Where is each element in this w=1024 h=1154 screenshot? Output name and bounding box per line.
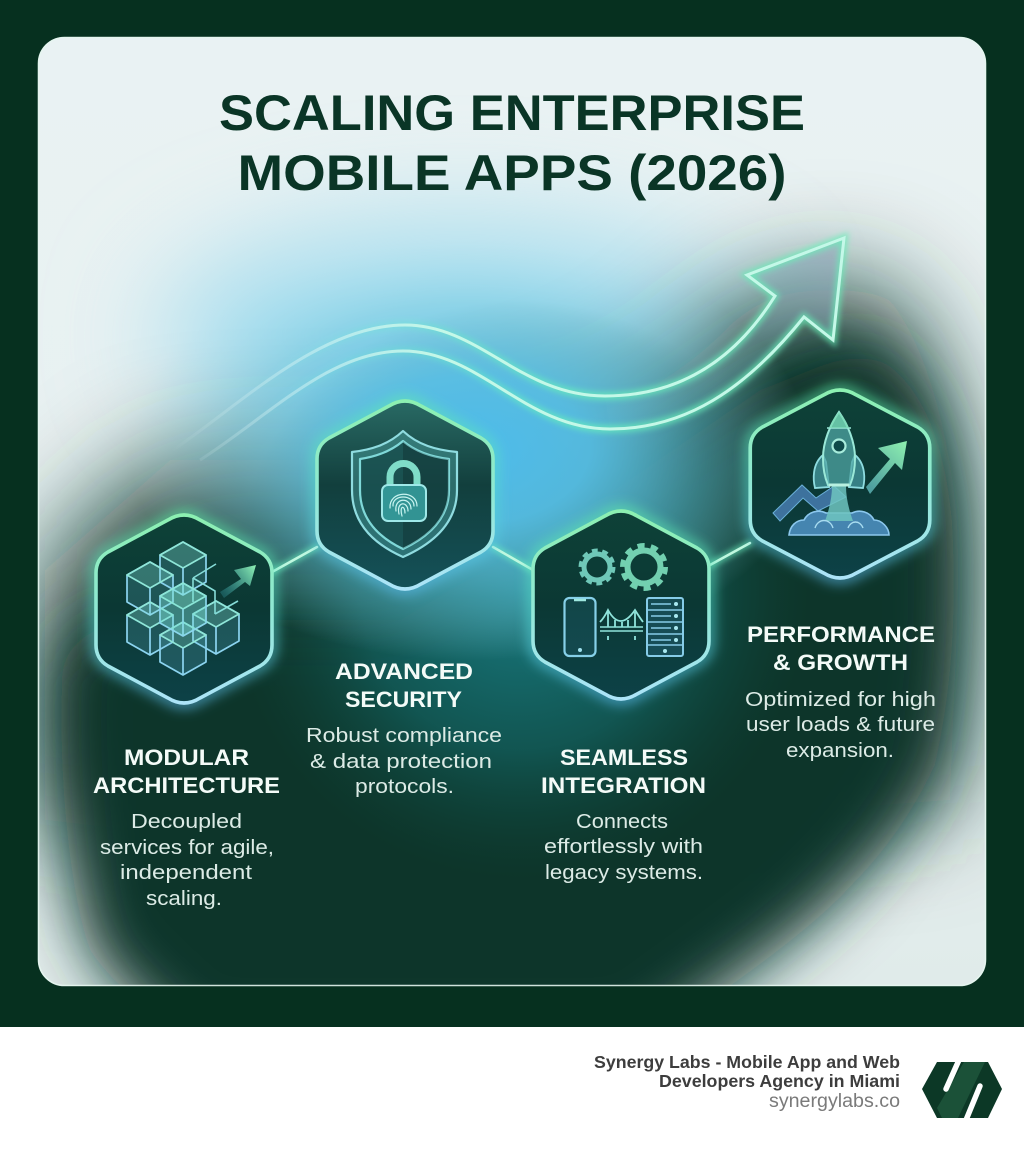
icon: shield with padlock	[352, 431, 457, 557]
footer	[0, 1027, 1024, 1154]
arrow: growth trend	[173, 238, 844, 460]
icon: Synergy Labs logo	[922, 1060, 1002, 1120]
step label: seamless integration: effortlessly with	[544, 835, 703, 858]
hexagon 2: advanced security	[317, 401, 493, 589]
step label: seamless integration: SEAMLESS	[560, 745, 688, 770]
step label: performance and growth: & GROWTH	[773, 650, 908, 675]
footer company text: synergylabs.co	[769, 1091, 900, 1112]
icon: cubes	[127, 542, 256, 675]
hexagon 3: seamless integration	[533, 511, 709, 699]
footer company text: Synergy Labs - Mobile App and Web	[594, 1052, 900, 1072]
step label: modular architecture: Decoupled	[131, 810, 242, 833]
step label: performance and growth	[745, 622, 936, 762]
step label: advanced security: protocols.	[355, 775, 454, 798]
hexagon 1: modular architecture	[96, 515, 272, 703]
step label: advanced security: ADVANCED	[335, 659, 473, 684]
step label: modular architecture: ARCHITECTURE	[93, 773, 280, 798]
step label: advanced security: & data protection	[310, 750, 492, 773]
step label: performance and growth: expansion.	[786, 739, 894, 762]
title: MOBILE APPS (2026)	[238, 145, 786, 201]
icon: rocket with growth arrow	[773, 412, 907, 535]
footer company text: Developers Agency in Miami	[659, 1071, 900, 1091]
step label: seamless integration	[541, 745, 706, 884]
step label: performance and growth: user loads & future	[746, 713, 935, 736]
step label: modular architecture: scaling.	[146, 887, 222, 910]
step label: advanced security: Robust compliance	[306, 724, 502, 747]
step label: seamless integration: INTEGRATION	[541, 773, 706, 798]
step label: advanced security	[306, 659, 502, 798]
title	[219, 85, 805, 201]
step label: seamless integration: legacy systems.	[545, 861, 703, 884]
step label: modular architecture	[93, 745, 280, 910]
step label: modular architecture: independent	[120, 861, 252, 884]
footer company text	[594, 1052, 900, 1112]
hexagon 4: performance and growth	[750, 390, 930, 578]
step label: seamless integration: Connects	[576, 810, 668, 833]
step label: advanced security: SECURITY	[345, 687, 462, 712]
step label: modular architecture: services for agile,	[100, 836, 274, 859]
connector lines	[272, 543, 750, 572]
step label: modular architecture: MODULAR	[124, 745, 249, 770]
icon: gears, phone, bridge and server	[564, 546, 683, 656]
title: SCALING ENTERPRISE	[219, 85, 805, 141]
step label: performance and growth: PERFORMANCE	[747, 622, 935, 647]
step label: performance and growth: Optimized for high	[745, 688, 936, 711]
